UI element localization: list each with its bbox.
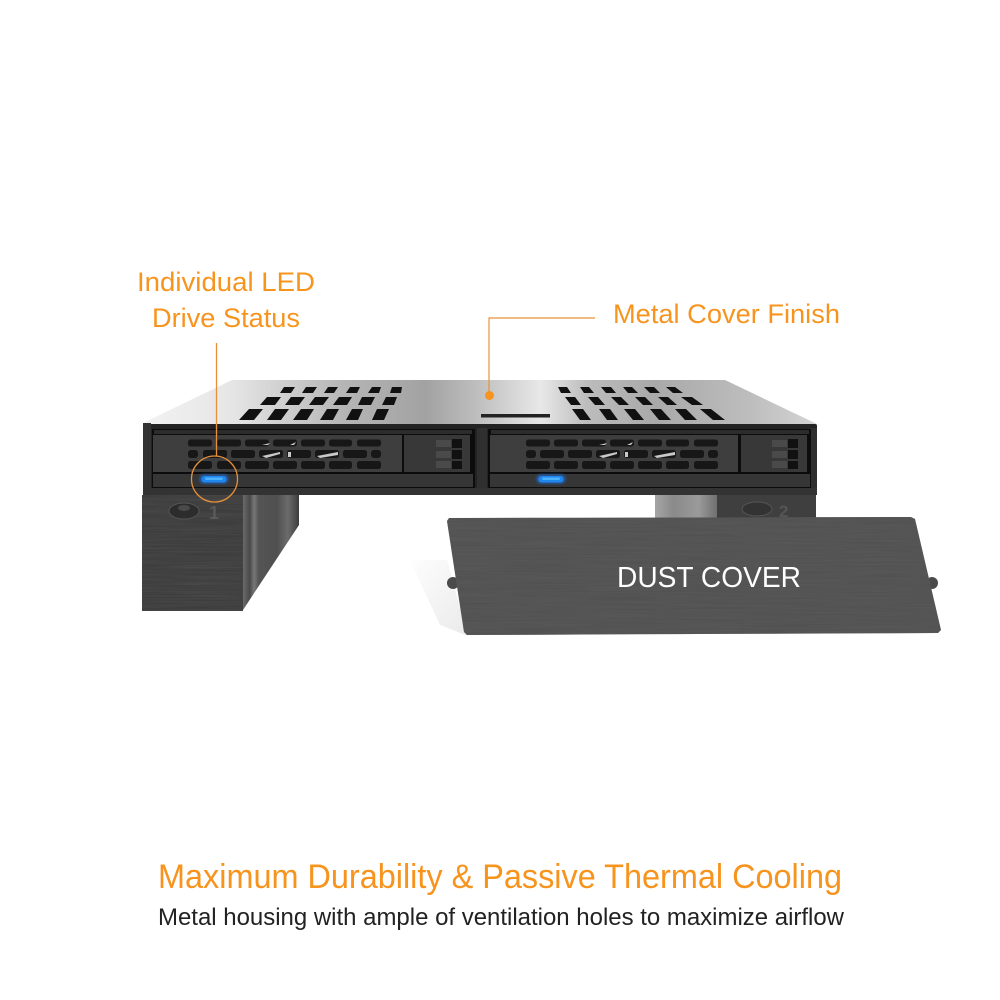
bay 2 vents <box>526 440 718 469</box>
bay 1 latch <box>436 439 462 469</box>
top metal plate <box>143 380 817 428</box>
LED 2 <box>536 474 566 484</box>
LED pointer line and ring <box>192 343 238 502</box>
subheading: Metal housing with ample of ventilation holes to maximize airflow <box>158 904 845 931</box>
infographic canvas <box>140 272 941 930</box>
left leg: 1 <box>209 503 219 523</box>
product: enclosure <box>142 380 817 611</box>
front frame <box>143 424 817 495</box>
bay 2 latch <box>772 439 798 469</box>
right leg behind dust cover: 2 <box>779 502 788 521</box>
top vents left <box>239 387 402 420</box>
centre slot <box>481 414 550 418</box>
dust cover label: DUST COVER <box>617 562 801 594</box>
bay 1 vents <box>188 440 381 469</box>
bay 2 vent glints <box>599 442 675 458</box>
top vents right <box>558 387 725 420</box>
dust cover shadow <box>410 560 468 636</box>
drive bay 1 <box>152 429 475 488</box>
callout label: individual LED drive status: Individual LED <box>137 267 315 297</box>
dust cover panel <box>445 515 943 637</box>
metal cover pointer line and dot <box>485 318 595 400</box>
drive bay 2 <box>488 429 811 488</box>
left leg <box>142 495 299 611</box>
callout label: metal cover finish: Metal Cover Finish <box>613 299 840 329</box>
callout label: individual LED drive status <box>137 267 315 333</box>
heading: Maximum Durability & Passive Thermal Cooling <box>158 858 842 896</box>
right leg behind dust cover <box>655 494 816 522</box>
bay 1 vent glints <box>262 442 338 458</box>
callout label: individual LED drive status: Drive Status <box>152 303 300 333</box>
LED 1 <box>199 474 229 484</box>
